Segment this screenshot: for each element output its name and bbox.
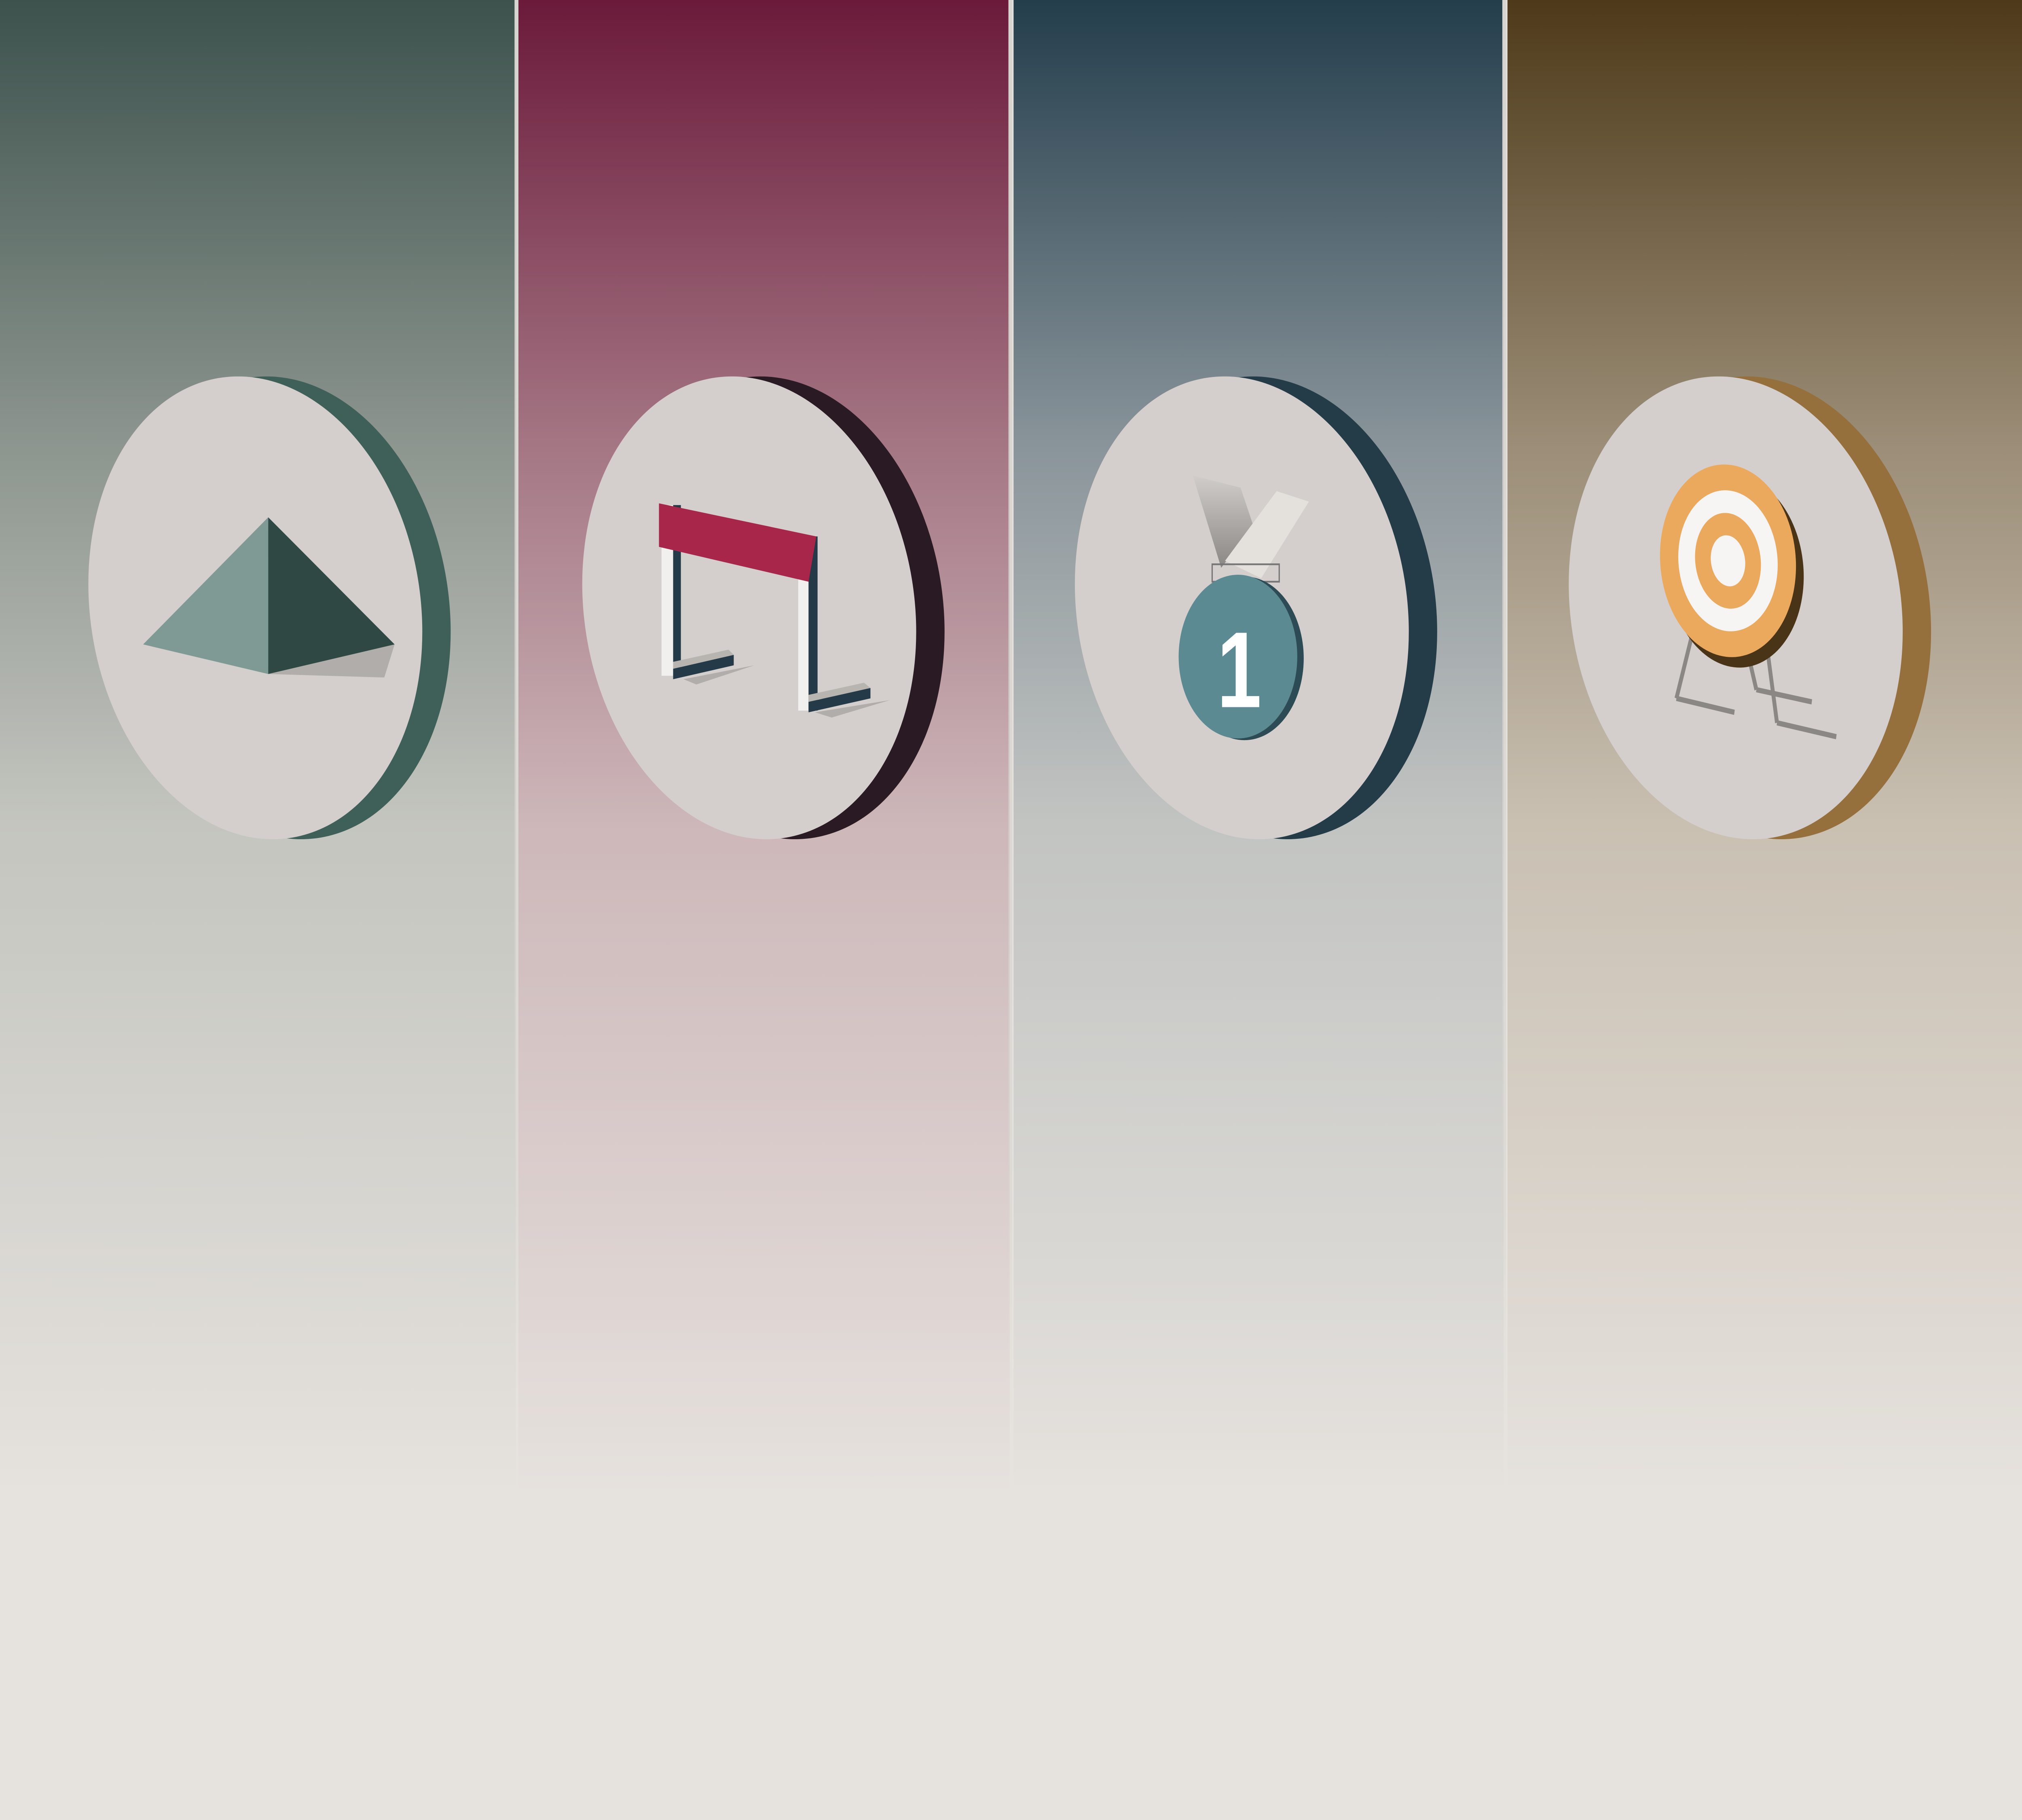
icon: pyramid disc	[20, 286, 519, 930]
icon: target disc	[1500, 286, 2000, 930]
panel: column 4 background	[1508, 0, 2022, 1498]
icon: hurdle disc	[514, 286, 1013, 930]
panel: column 1 background	[0, 0, 516, 1498]
panel: column 2 background	[518, 0, 1010, 1498]
panel: column 3 background	[1013, 0, 1504, 1498]
icon: medal disc	[1006, 286, 1506, 930]
text: number 1: 1	[1217, 609, 1261, 730]
